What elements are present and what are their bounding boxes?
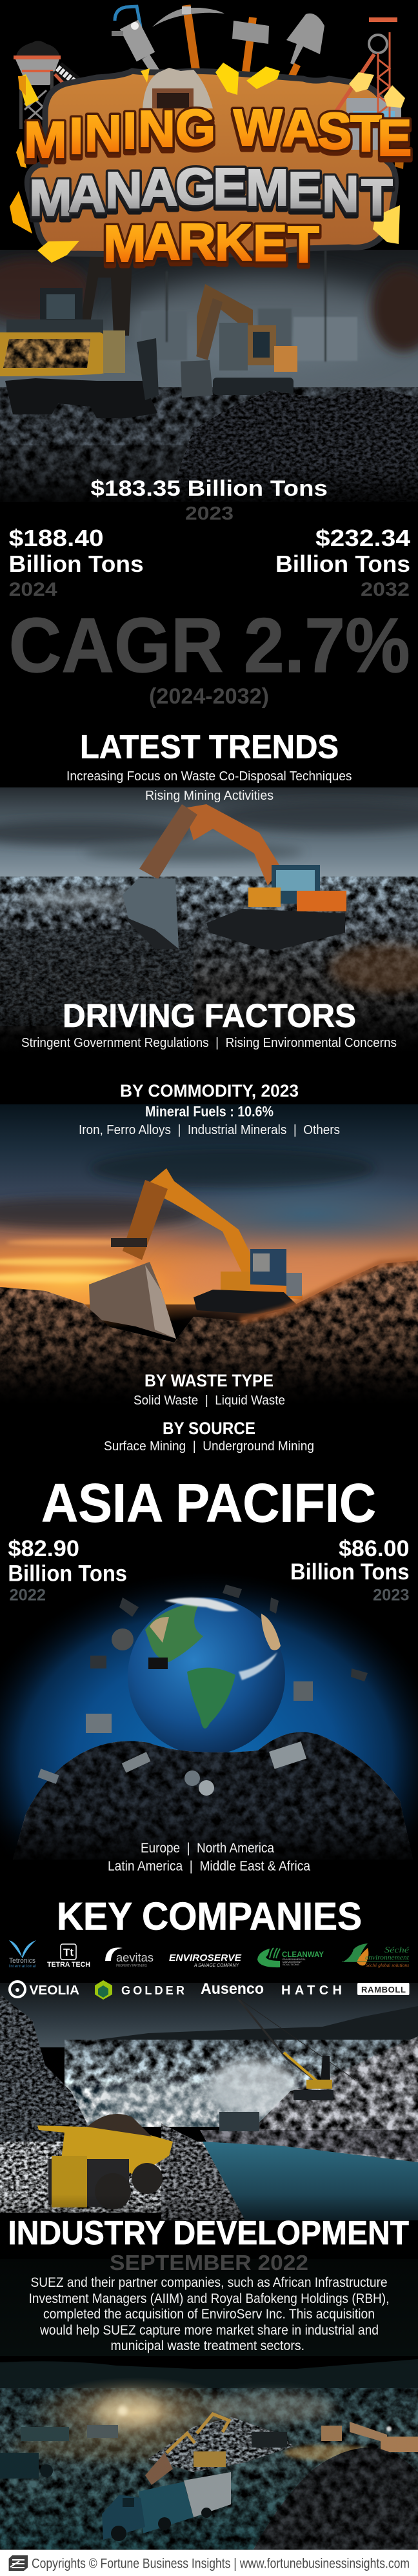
pond [203, 2142, 418, 2220]
market value 2024: 2024 [9, 579, 57, 600]
segment: by source: BY SOURCE [163, 1419, 255, 1438]
heading: key companies: KEY COMPANIES [57, 1895, 362, 1938]
photo: orange excavator on waste field [0, 787, 418, 1053]
heading: industry development [8, 2215, 409, 2275]
key company logos, row 1 [9, 1940, 410, 1969]
logo: Ausenco: Ausenco [201, 1980, 264, 1998]
heading: latest trends: Increasing Focus on Waste Co-Disposal Techniques [66, 769, 352, 784]
logo: EnviroServe: ENVIROSERVE [169, 1952, 242, 1963]
terrain [0, 1261, 418, 1405]
excavator [89, 1168, 303, 1339]
regional value 2022: 2022 [9, 1587, 46, 1605]
segment: by source: Surface Mining | Underground Mining [104, 1439, 314, 1454]
market value 2024: Billion Tons [9, 551, 144, 577]
crane [219, 1998, 355, 2131]
photo: open pit quarry [0, 1983, 418, 2220]
regional value 2022: $82.90 [8, 1536, 79, 1561]
logo: Tetronics: Tetronics [9, 1957, 35, 1965]
icon: Fortune Business Insights logo [9, 2555, 28, 2571]
logo: Veolia [10, 1982, 79, 1998]
logo: Golder [95, 1980, 184, 2000]
title line 1: MINING WASTE [24, 99, 412, 168]
other regions [108, 1841, 310, 1874]
heading: latest trends [66, 728, 352, 803]
heading: latest trends: Rising Mining Activities [145, 789, 274, 803]
icon: hopper and coal pile [14, 41, 61, 129]
logo: Ramboll [357, 1983, 409, 1995]
regional value 2023 [290, 1536, 409, 1605]
heading: driving factors [21, 997, 397, 1050]
icon: conveyor [55, 68, 110, 119]
icon: headframe tower and building [335, 17, 401, 150]
footer [0, 2550, 418, 2576]
key company logos, row 2 [10, 1980, 409, 2000]
market value 2032 [275, 525, 410, 600]
icon: pickaxe [152, 5, 224, 72]
logo: Hatch: HATCH [281, 1983, 342, 1998]
market value 2032: Billion Tons [275, 551, 410, 577]
regional value 2023: $86.00 [339, 1536, 409, 1561]
segment: by waste type: BY WASTE TYPE [144, 1371, 274, 1390]
logo: Cleanway [257, 1948, 324, 1967]
logo: Seche environnement: environnement [365, 1954, 409, 1962]
icon: mine entrance [143, 68, 213, 108]
market value 2032: 2032 [361, 579, 410, 600]
haul truck [37, 2114, 173, 2209]
development description: SUEZ and their partner companies, such as African Infrastructure [31, 2275, 387, 2290]
heading: asia pacific: ASIA PACIFIC [41, 1473, 376, 1534]
development description: completed the acquisition of EnviroServ Inc. This acquisition [43, 2307, 375, 2322]
regional value 2023: Billion Tons [290, 1559, 409, 1585]
photo: night waste site [0, 2259, 418, 2550]
foreground rubble [168, 387, 418, 502]
plaque [27, 71, 395, 255]
market value 2023 [90, 476, 328, 524]
segment: by commodity: BY COMMODITY, 2023 [120, 1081, 299, 1100]
icon: shovel [277, 14, 324, 106]
development description [29, 2275, 389, 2353]
logo: Seche environnement [342, 1943, 410, 1968]
logo: Tetra Tech: Tt [63, 1947, 74, 1958]
photo: excavators on demolition site [0, 250, 418, 502]
delivery truck [102, 2472, 231, 2541]
logo: Tetronics [9, 1940, 36, 1969]
other regions: Europe | North America [141, 1841, 274, 1856]
logo: EnviroServe: A SAVAGE COMPANY [194, 1963, 239, 1968]
left excavator [0, 255, 159, 418]
logo: Golder: GOLDER [121, 1984, 184, 1997]
logo: Tetronics: International [9, 1965, 36, 1969]
segment: by waste type [134, 1371, 285, 1408]
logo: Cleanway: MANAGEMENT [283, 1961, 303, 1963]
regional value 2022: Billion Tons [8, 1561, 127, 1587]
title logo: mining waste management market [10, 5, 412, 273]
heading: driving factors: Stringent Government Regulations | Rising Environmental Concerns [21, 1036, 397, 1050]
segment: by commodity: Mineral Fuels : 10.6% [145, 1104, 274, 1119]
icon: sledgehammer [232, 17, 269, 106]
sunset streaks [0, 1239, 148, 1283]
segment: by waste type: Solid Waste | Liquid Waste [134, 1394, 285, 1408]
market value 2024 [9, 525, 144, 600]
icon: gold nuggets [10, 63, 405, 263]
development description: Investment Managers (AIIM) and Royal Bafokeng Holdings (RBH), [29, 2291, 389, 2306]
market value 2023: $183.35 Billion Tons [90, 476, 328, 501]
heading: driving factors: DRIVING FACTORS [63, 997, 356, 1034]
logo: aevitas: aevitas [116, 1951, 154, 1964]
title line 2: MANAGEMENT [29, 157, 393, 227]
logo: EnviroServe [169, 1952, 242, 1968]
regional value 2023: 2023 [373, 1587, 409, 1605]
e-waste pile [13, 1732, 413, 1860]
logo: Cleanway: SOLUTIONS [283, 1963, 300, 1966]
logo: Cleanway: ENVIRONMENTAL [283, 1958, 306, 1961]
market value 2032: $232.34 [315, 525, 410, 551]
foreground ground [0, 387, 418, 502]
other regions: Latin America | Middle East & Africa [108, 1859, 310, 1874]
CAGR figure: (2024-2032) [149, 684, 269, 709]
right excavator [181, 284, 297, 398]
title line 3: MARKET [103, 213, 319, 273]
development description: municipal waste treatment sectors. [111, 2338, 304, 2353]
rubble and machinery [0, 2406, 418, 2485]
logo: Ramboll: RAMBOLL [361, 1985, 406, 1994]
market value 2024: $188.40 [9, 525, 104, 551]
photo: excavator at sunset [0, 1104, 418, 1405]
regional value 2022 [8, 1536, 127, 1605]
development description: would help SUEZ capture more market share in industrial and [39, 2323, 379, 2338]
logo: Seche environnement: Séché global solutions [366, 1963, 409, 1968]
heading: industry development: SEPTEMBER 2022 [110, 2251, 308, 2275]
floating debris [86, 1585, 368, 1733]
icon: jackhammer [112, 6, 157, 75]
logo: aevitas [105, 1947, 154, 1968]
logo: Seche environnement: Séché [384, 1945, 410, 1954]
logo: Cleanway: CLEANWAY [282, 1950, 324, 1959]
segment: by commodity [79, 1081, 340, 1137]
logo: Tetra Tech [47, 1944, 90, 1969]
heading: latest trends: LATEST TRENDS [80, 728, 339, 766]
photo: earth on e-waste pile [0, 1582, 418, 1860]
segment: by source [104, 1419, 314, 1454]
logo: aevitas: PROPERTY PARTNERS [116, 1964, 148, 1968]
market value 2023: 2023 [185, 503, 234, 524]
segment: by commodity: Iron, Ferro Alloys | Industrial Minerals | Others [79, 1123, 340, 1137]
globe [128, 1597, 285, 1755]
logo: Veolia: VEOLIA [30, 1983, 79, 1998]
logo: Tetra Tech: TETRA TECH [47, 1961, 90, 1969]
dark mound [254, 2448, 418, 2550]
excavator [123, 804, 346, 950]
